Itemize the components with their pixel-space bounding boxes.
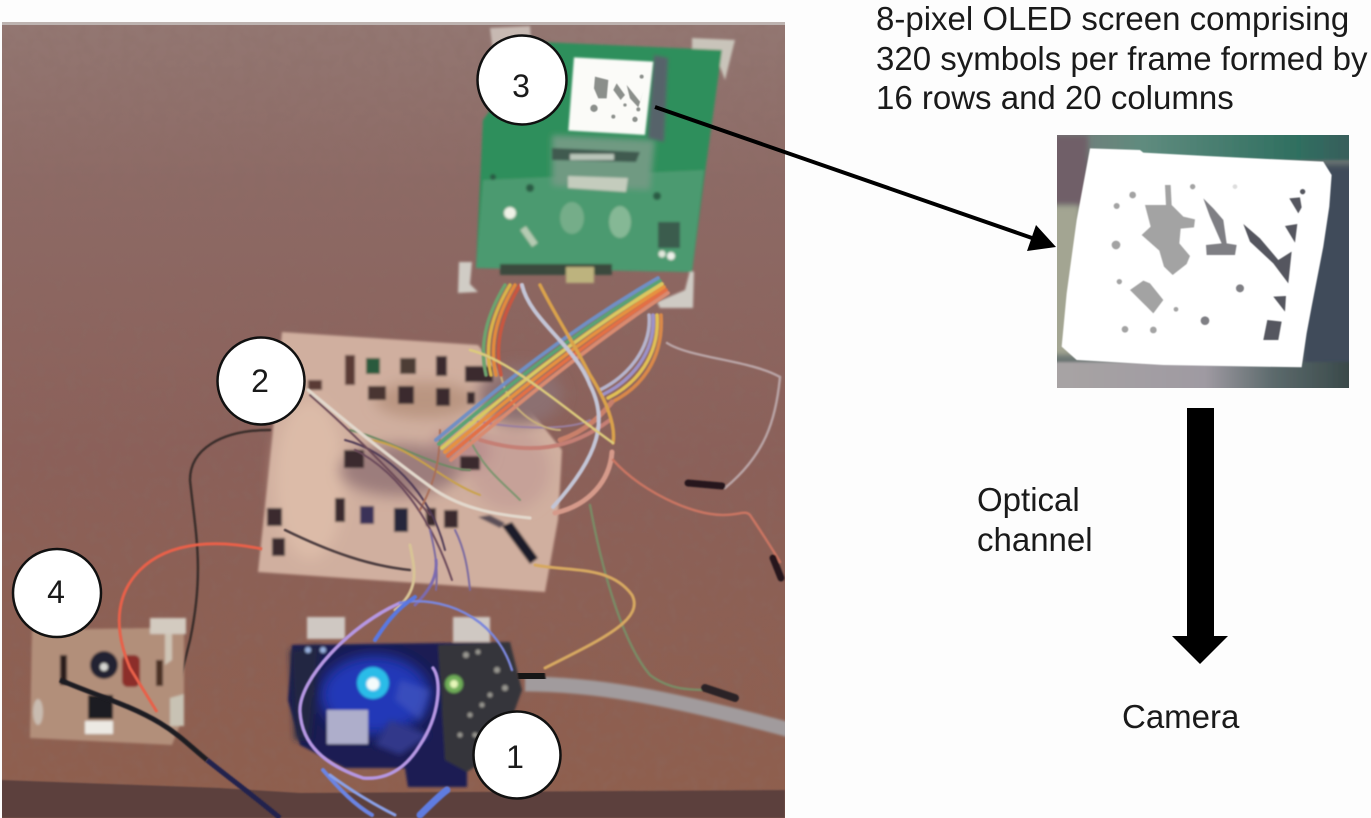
arrow: OLED screen to enlarged view (655, 107, 1056, 251)
wiring harness (180, 278, 781, 698)
arrow: optical channel (1172, 408, 1228, 664)
label: optical channel: Optical (977, 481, 1080, 518)
screen description text: 320 symbols per frame formed by (876, 40, 1368, 77)
green wire (590, 505, 710, 690)
second circuit board: perfboard (258, 332, 562, 592)
label: optical channel: channel (977, 521, 1093, 558)
grey signal wires (522, 285, 599, 507)
salmon signal wire (613, 460, 780, 562)
screen description text: 8-pixel OLED screen comprising (876, 0, 1349, 37)
ribbon to header (483, 285, 520, 375)
second ribbon arc (560, 315, 661, 440)
red power wire (119, 544, 262, 712)
callout marker 4: 4 (47, 574, 65, 610)
callout marker 2: 2 (251, 363, 269, 399)
rainbow ribbon cable (436, 278, 668, 460)
table edge (0, 780, 785, 818)
dense thin wires on perfboard (345, 370, 610, 590)
power supply board (30, 618, 186, 745)
callout marker 1 (474, 712, 560, 798)
label: camera: Camera (1122, 698, 1240, 735)
black power cable (60, 680, 280, 818)
OLED screen on board (568, 57, 653, 135)
screen description text: 16 rows and 20 columns (876, 79, 1234, 116)
callout marker 4 (13, 549, 101, 637)
purple wire loop (300, 597, 512, 815)
symbol clusters (1112, 184, 1237, 333)
microcontroller board with blue LED (288, 597, 522, 815)
black power wire (180, 430, 270, 680)
yellow wire loop (535, 565, 634, 668)
callout marker 2 (218, 338, 304, 424)
callout marker 3 (478, 36, 566, 124)
callout marker 1: 1 (506, 739, 524, 775)
panel: photograph of hardware prototype (0, 22, 790, 818)
OLED display board (458, 26, 735, 308)
enlarged OLED screen frame (1057, 135, 1349, 388)
USB cable (518, 674, 790, 730)
callout marker 3: 3 (512, 68, 530, 104)
